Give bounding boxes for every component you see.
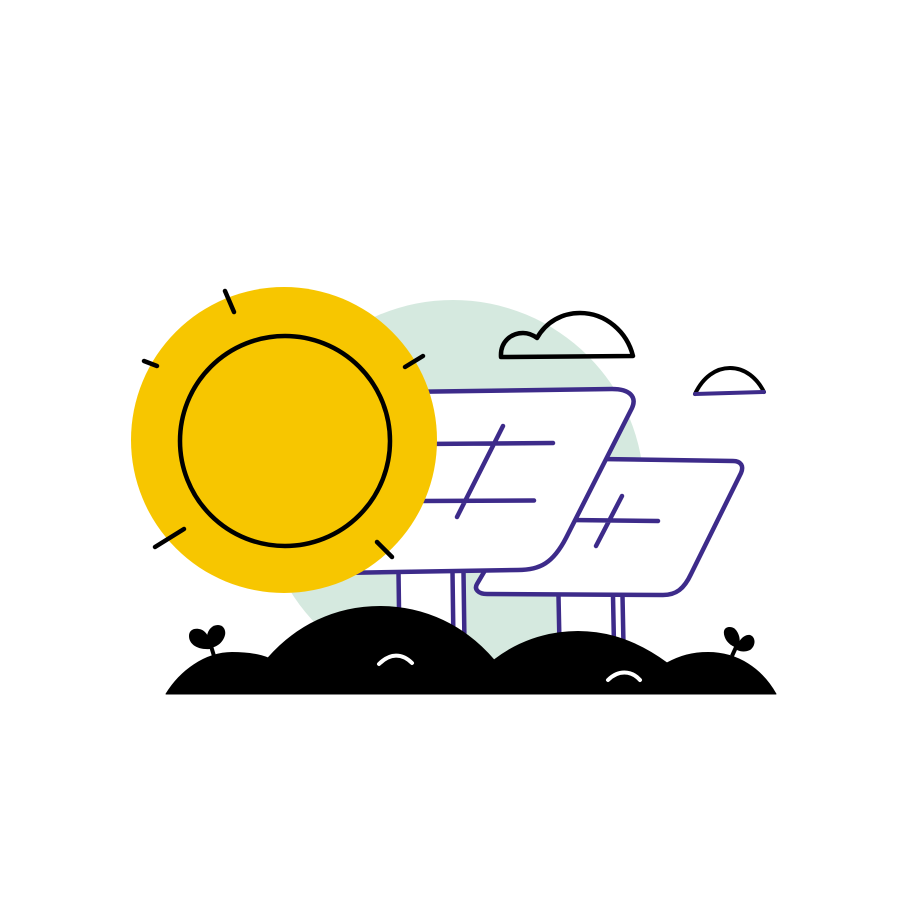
large cloud — [501, 313, 633, 357]
sun inner ring — [180, 336, 390, 546]
right sprout — [724, 627, 754, 656]
large panel grid — [420, 426, 553, 517]
sun disc — [131, 287, 437, 593]
small cloud — [695, 368, 764, 394]
ground hills — [166, 606, 776, 694]
small solar panel — [476, 459, 742, 645]
background circle — [262, 300, 644, 682]
large solar panel — [340, 389, 634, 645]
small panel posts — [558, 596, 624, 645]
large panel posts — [398, 572, 465, 645]
left sprout — [189, 625, 225, 656]
sun — [131, 287, 437, 593]
small panel grid — [570, 496, 658, 546]
sun rays — [144, 291, 423, 557]
hill highlights — [379, 656, 640, 680]
small panel body — [476, 459, 742, 595]
large panel body — [340, 389, 634, 573]
